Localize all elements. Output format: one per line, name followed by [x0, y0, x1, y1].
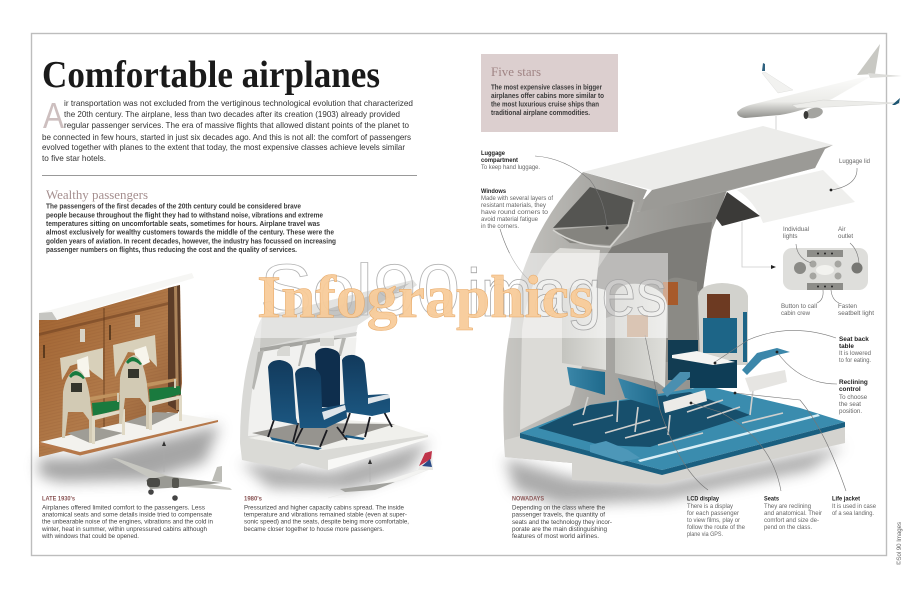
- credit: ©Sol 90 Images: [896, 522, 903, 565]
- lamps: [80, 329, 85, 342]
- label: button to call cabin crew: [781, 303, 817, 317]
- caption: late 1930s: with windows that could be opened.: [41, 533, 139, 540]
- watermark: sol90images: images: [467, 255, 667, 331]
- wealthy passengers text block: The passengers of the first decades of the 20th century could be considered brave: [46, 204, 301, 210]
- caption: late 1930s: Airplanes offered limited comfort to the passengers. Less: [42, 504, 206, 512]
- caption: late 1930s: anatomical seats and some details inside tried to compensate: [42, 512, 212, 518]
- arrow: 1930s plane to cabin: [162, 441, 166, 472]
- label: luggage compartment: compartment: [481, 157, 519, 164]
- panel: five stars: The most expensive classes in bigger: [491, 84, 602, 92]
- caption: late 1930s: the unbearable noise of the engines, vibrations and the cold in: [42, 519, 213, 526]
- label: individual lights: lights: [783, 233, 797, 240]
- label: seat back table: to for eating.: [839, 357, 871, 364]
- panel: five stars: [481, 54, 618, 132]
- label: windows: avoid material fatigue: [481, 216, 539, 223]
- heading: five stars: Five stars: [491, 64, 541, 79]
- panel: five stars: the most luxurious cruise ships than: [491, 102, 599, 108]
- intro text block: [42, 95, 413, 163]
- seat: front right: [295, 367, 347, 428]
- seat: far right with table: [672, 283, 790, 392]
- intro text block: regular passenger services. The era of massive flights that allowed distant points of the planet to: [64, 120, 409, 130]
- label: fasten seatbelt light: Fasten: [838, 303, 858, 310]
- label: luggage compartment: [481, 150, 540, 171]
- intro text block: to five star hotels.: [42, 153, 106, 163]
- label: seats: Seats: [764, 496, 779, 502]
- label: life jacket: of a sea landing.: [832, 510, 874, 517]
- icon: 1930s trimotor airplane: [112, 458, 232, 501]
- caption: nowadays: porate are the main distinguishing: [512, 526, 607, 533]
- caption: nowadays: features of most world airlines.: [512, 533, 599, 540]
- seat: front row left: [562, 285, 606, 395]
- wooden wall: [39, 285, 182, 457]
- caption: nowadays: seats and the technology they incor-: [512, 519, 612, 526]
- icon: modern airliner: [737, 44, 902, 120]
- icon: LCD screen: [707, 294, 730, 318]
- label: individual lights: [783, 226, 809, 240]
- label: reclining control: [839, 379, 868, 415]
- caption: late 1930s: winter, heat in summer, within unpressured cabins although: [41, 526, 207, 533]
- label: seats: comfort and size de-: [764, 517, 819, 524]
- callout lines: [500, 156, 859, 491]
- illustration: 1980s cabin: [240, 280, 430, 490]
- heading: wealthy passengers: Wealthy passengers: [46, 187, 148, 202]
- icon: rear LCD screen: [663, 282, 678, 305]
- illustration: 1930s wooden cabin: [39, 273, 220, 482]
- label: LCD display: follow the route of the: [687, 524, 746, 531]
- seat: rear right: [342, 355, 390, 416]
- label: LATE 1930's: [42, 496, 76, 502]
- label: seat back table: It is lowered: [839, 350, 872, 357]
- label: reclining control: position.: [839, 408, 862, 415]
- caption: late 1930s: [41, 496, 213, 540]
- label: luggage compartment: Luggage: [481, 150, 505, 157]
- label: windows: have round corners to: [481, 209, 549, 216]
- label: button to call cabin crew: cabin crew: [781, 310, 811, 317]
- seat: rear row: [663, 278, 698, 380]
- label: 1980's: [244, 496, 263, 502]
- caption: nowadays: [512, 496, 612, 540]
- wealthy passengers text block: [46, 187, 336, 254]
- overhead top panel: [583, 126, 833, 190]
- label: LCD display: for each passenger: [687, 510, 739, 517]
- label: reclining control: To choose: [839, 394, 868, 401]
- label: LCD display: There is a display: [687, 503, 734, 510]
- label: reclining control: the seat: [839, 401, 861, 408]
- seat: front left: [268, 360, 298, 425]
- label: button to call cabin crew: Button to call: [781, 303, 817, 310]
- icon: concorde airplane: [328, 451, 433, 498]
- roof panel: [39, 273, 194, 320]
- luggage bin: [553, 187, 633, 228]
- label: LCD display: plane via GPS.: [687, 531, 723, 538]
- label: seat back table: table: [839, 343, 854, 350]
- label: life jacket: It is used in case: [832, 503, 877, 510]
- label: seats: pend on the class.: [764, 524, 812, 531]
- caption: 1980s: sonic speed) and the seats, despite being more comfortable,: [244, 519, 409, 526]
- caption: nowadays: Depending on the class where the: [512, 504, 605, 512]
- drop cap: A: [43, 95, 64, 136]
- caption: 1980s: temperature and vibrations remained stable (even at super-: [244, 512, 407, 518]
- label: luggage compartment: To keep hand luggage.: [481, 164, 540, 171]
- panel: five stars: traditional airplane commodities.: [491, 110, 590, 117]
- cabin wall: [248, 332, 357, 436]
- arrow: concorde to cabin: [368, 459, 372, 482]
- wealthy passengers text block: golden years of aviation. In recent decades, however, the industry has focussed on increasing: [46, 238, 336, 245]
- floor slab: [248, 420, 428, 450]
- caption: nowadays: passenger travels, the quantity of: [512, 512, 605, 518]
- label: seats: They are reclining: [764, 503, 812, 510]
- label: windows: Made with several layers of: [481, 195, 553, 202]
- seat: left vintage chair: [62, 369, 125, 444]
- seat: front row right: [615, 284, 708, 413]
- seats: blue seats: [268, 348, 392, 450]
- floor: [40, 412, 218, 452]
- label: fasten seatbelt light: [838, 303, 874, 317]
- outer shell: [503, 172, 727, 463]
- panel: five stars: airplanes offer cabins more similar to: [491, 93, 604, 100]
- intro text block: be connected in few hours, started in just six decades ago. And this is not all: the comfort of passengers: [42, 132, 411, 142]
- intro text block: evolved together with planes to the extent that today, the most expensive classes achieve levels similar: [42, 142, 405, 152]
- seat back table: [672, 351, 735, 365]
- label: life jacket: [832, 496, 877, 517]
- label: fasten seatbelt light: seatbelt light: [838, 310, 874, 317]
- wealthy passengers text block: passenger numbers on flights, thus reducing the cost and the quality of services.: [46, 247, 297, 254]
- caption: 1980s: [244, 496, 409, 533]
- luggage lid: [716, 192, 760, 226]
- label: air outlet: [838, 226, 853, 240]
- label: LCD display: [687, 496, 746, 538]
- caption: 1980s: became closer together to house more passengers.: [244, 526, 384, 533]
- seat: right vintage chair: [119, 355, 182, 430]
- watermark: sol90images: [260, 251, 667, 331]
- arrow: airliner to cabin: [774, 116, 778, 140]
- title: Comfortable airplanes: [42, 54, 380, 96]
- label: seats: [764, 496, 822, 531]
- label: reclining control: control: [839, 386, 861, 393]
- label: windows: in the corners.: [481, 223, 519, 230]
- label: windows: [481, 188, 553, 230]
- connector: lid to control unit: [742, 222, 776, 269]
- wealthy passengers text block: temperatures sitting on uncomfortable seats, sometimes for hours. Airplane travel was: [46, 221, 320, 228]
- illustration: modern cabin: [503, 126, 855, 505]
- label: life jacket: Life jacket: [832, 496, 861, 502]
- label: reclining control: Reclining: [839, 379, 868, 386]
- intro text block: the 20th century. The airplane, less than two decades after its creation (1903) already provided: [64, 109, 400, 119]
- label: LCD display: LCD display: [687, 496, 719, 502]
- floor: [520, 386, 845, 470]
- watermark: translucent band: [255, 253, 668, 338]
- seat: rear left: [315, 348, 340, 407]
- label: luggage lid: Luggage lid: [839, 158, 871, 165]
- label: LCD display: to view films, play or: [687, 517, 740, 524]
- fuselage shell: [240, 280, 417, 443]
- label: individual lights: Individual: [783, 226, 809, 233]
- label: windows: resistant materials, they: [481, 202, 547, 209]
- caption: 1980s: Pressurized and higher capacity cabins spread. The inside: [244, 504, 404, 512]
- panel: overhead control unit: [783, 248, 868, 290]
- label: seat back table: [839, 336, 872, 364]
- label: NOWADAYS: [512, 496, 544, 502]
- watermark: sol90images: Sol90: [260, 251, 460, 331]
- label: windows: Windows: [481, 188, 506, 195]
- label: seat back table: Seat back: [839, 336, 869, 343]
- watermark: infographics: Infographics: [257, 264, 593, 330]
- label: seats: and anatomical. Their: [764, 510, 822, 517]
- label: air outlet: Air: [838, 226, 846, 233]
- wealthy passengers text block: almost exclusively for wealthy customers towards the middle of the century. These were the: [46, 230, 334, 237]
- wealthy passengers text block: people because throughout the flight they had to withstand noise, vibrations and extreme: [46, 212, 323, 219]
- curtains: [60, 348, 103, 380]
- label: air outlet: outlet: [838, 233, 853, 240]
- seat legs: [573, 390, 783, 445]
- intro text block: ir transportation was not excluded from the vertiginous technological evolution that characterized: [64, 98, 413, 108]
